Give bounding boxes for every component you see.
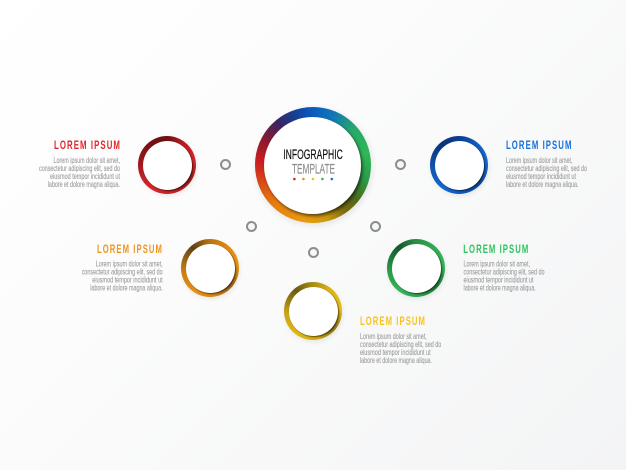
central title text	[283, 147, 343, 180]
text block: red	[39, 140, 121, 189]
body copy: Lorem ipsum dolor sit amet,	[506, 156, 572, 165]
body copy: Lorem ipsum dolor sit amet,	[96, 260, 163, 269]
body copy: eiusmod tempor incididunt ut	[92, 276, 163, 285]
text block: yellow	[360, 316, 442, 365]
heading: lorem ipsum: LOREM IPSUM	[463, 244, 529, 256]
central white disc	[264, 117, 361, 214]
icon: orange ring	[181, 239, 239, 297]
panel: blue step	[430, 136, 587, 196]
panel: green step	[387, 239, 545, 299]
body copy: labore et dolore magna aliqua.	[48, 180, 120, 189]
body copy	[506, 156, 587, 189]
heading: lorem ipsum: LOREM IPSUM	[360, 316, 426, 328]
connector dot: bottom	[308, 247, 318, 258]
body copy: Lorem ipsum dolor sit amet,	[54, 156, 120, 165]
body copy: eiusmod tempor incididunt ut	[50, 172, 121, 181]
color dots row	[293, 178, 333, 180]
panel: orange step	[82, 239, 240, 299]
body copy	[360, 332, 442, 365]
connector dot: right	[395, 159, 406, 170]
body copy: Lorem ipsum dolor sit amet,	[464, 260, 530, 269]
heading: lorem ipsum: LOREM IPSUM	[54, 140, 121, 152]
panel: yellow step	[284, 282, 442, 365]
subheading: template: TEMPLATE	[292, 161, 335, 176]
panel: red step	[39, 136, 197, 196]
body copy	[82, 260, 163, 293]
text block: orange	[82, 244, 163, 293]
body copy	[39, 156, 121, 189]
body copy: eiusmod tempor incididunt ut	[506, 172, 577, 181]
heading: infographic: INFOGRAPHIC	[283, 147, 343, 162]
connector dot: lower right	[370, 221, 380, 232]
connector dot: left	[220, 159, 231, 170]
body copy: labore et dolore magna aliqua.	[90, 284, 163, 293]
body copy: labore et dolore magna aliqua.	[506, 180, 578, 189]
icon: red ring	[138, 136, 196, 194]
body copy: labore et dolore magna aliqua.	[360, 356, 432, 365]
body copy: consectetur adipiscing elit, sed do	[82, 268, 163, 277]
central circle: infographic template	[254, 107, 374, 226]
icon: multicolor gradient ring	[255, 107, 371, 223]
icon: green ring	[387, 239, 445, 297]
text block: green	[463, 244, 545, 293]
connector dot: lower left	[246, 221, 256, 232]
heading: lorem ipsum: LOREM IPSUM	[506, 140, 572, 152]
icon: blue ring	[430, 136, 488, 194]
body copy: consectetur adipiscing elit, sed do	[464, 268, 545, 277]
body copy: consectetur adipiscing elit, sed do	[360, 340, 442, 349]
body copy: consectetur adipiscing elit, sed do	[506, 164, 587, 173]
heading: lorem ipsum: LOREM IPSUM	[97, 244, 163, 256]
body copy: eiusmod tempor incididunt ut	[464, 276, 534, 285]
body copy: eiusmod tempor incididunt ut	[360, 348, 431, 357]
icon: yellow ring	[284, 282, 342, 340]
body copy	[464, 260, 545, 293]
text block: blue	[506, 140, 587, 189]
body copy: Lorem ipsum dolor sit amet,	[360, 332, 427, 341]
body copy: consectetur adipiscing elit, sed do	[39, 164, 120, 173]
body copy: labore et dolore magna aliqua.	[464, 284, 536, 293]
